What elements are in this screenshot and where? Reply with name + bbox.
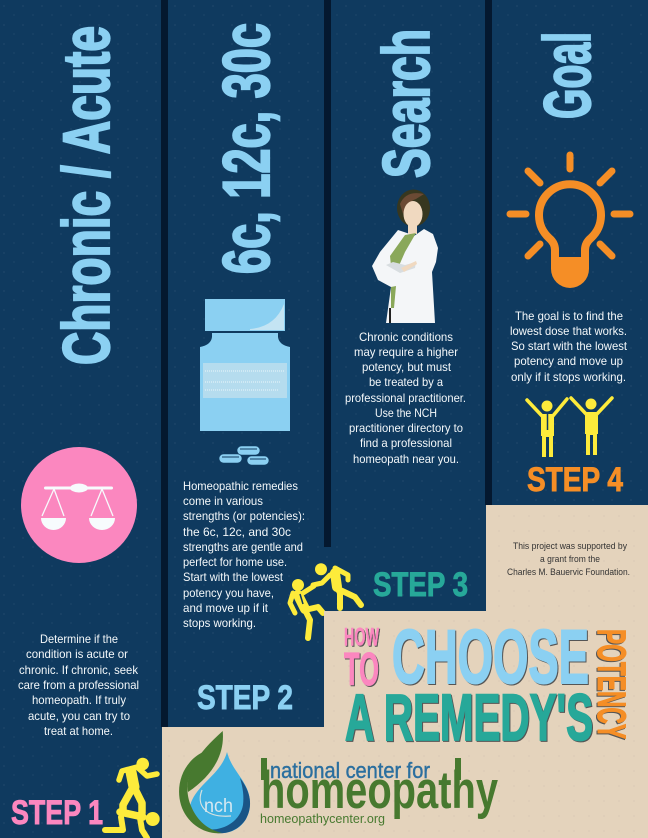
text: step 1 description: Determine if the bbox=[40, 632, 118, 646]
text: step 1 description: care from a professional bbox=[18, 678, 139, 692]
step 2 label: STEP 2 bbox=[197, 679, 293, 717]
step 4 label: STEP 4 bbox=[527, 461, 623, 499]
title: how to choose a remedy's potency bbox=[344, 615, 633, 754]
text: step 2 description: Homeopathic remedies bbox=[183, 479, 298, 493]
panel: step 1 chronic or acute bbox=[11, 26, 160, 838]
icon: two cheering people bbox=[527, 398, 612, 457]
text: step 4 description: So start with the lowest bbox=[511, 339, 628, 353]
text: grant acknowledgement bbox=[507, 541, 630, 578]
text: step 3 description: potency, but must bbox=[362, 360, 452, 374]
text: step 3 description: homeopath near you. bbox=[353, 452, 459, 466]
text: step 3 description: Use the NCH bbox=[375, 406, 437, 420]
step 3 label: STEP 3 bbox=[373, 566, 468, 604]
panel: beige title and logo area bbox=[162, 505, 648, 838]
text: step 3 description: practitioner directory to bbox=[349, 421, 463, 435]
title: how to choose a remedy's potency: HOW bbox=[344, 624, 379, 652]
text: step 3 description: find a professional bbox=[360, 436, 452, 450]
text: grant acknowledgement: Charles M. Bauervic Foundation. bbox=[507, 567, 630, 578]
text: step 1 description: treat at home. bbox=[44, 724, 113, 738]
text: step 1 description: homeopath. If truly bbox=[32, 693, 126, 707]
logo text: website: homeopathycenter.org bbox=[260, 811, 385, 826]
logo text: homeopathy: homeopathy bbox=[261, 761, 498, 820]
text: step 4 description: potency and move up bbox=[514, 354, 623, 368]
icon: doctor in white coat bbox=[372, 190, 438, 323]
panel: step 2 potencies bbox=[183, 23, 305, 717]
text: grant acknowledgement: a grant from the bbox=[540, 554, 600, 565]
step 1 label: STEP 1 bbox=[11, 794, 103, 832]
icon: leaf and water drop: nch bbox=[204, 796, 233, 817]
logo: national center for homeopathy bbox=[179, 731, 498, 833]
text: step 2 description: come in various bbox=[183, 494, 263, 508]
title: how to choose a remedy's potency: POTENCY bbox=[589, 629, 633, 739]
icon: soccer players bbox=[105, 758, 160, 838]
text: step 2 description: strengths (or potencies): bbox=[183, 509, 305, 523]
text: step 4 description: lowest dose that works. bbox=[510, 324, 627, 338]
text: grant acknowledgement: This project was supported by bbox=[513, 541, 627, 552]
text: step 4 description bbox=[510, 309, 628, 384]
text: step 1 description bbox=[18, 632, 139, 738]
text: step 1 description: chronic. If chronic, seek bbox=[19, 663, 139, 677]
icon: pills bbox=[219, 446, 269, 465]
text: step 2 description: and move up if it bbox=[183, 601, 269, 615]
icon: light bulb bbox=[510, 155, 630, 288]
logo text: national center for: national center for bbox=[270, 758, 430, 783]
panel: step 4 goal bbox=[510, 32, 630, 499]
icon: scales in pink circle bbox=[21, 447, 137, 563]
panel: step 3 search bbox=[290, 29, 468, 638]
text: step 2 description: strengths are gentle and bbox=[183, 540, 303, 554]
text: step 2 description: stops working. bbox=[183, 616, 256, 630]
text: step 3 description: Chronic conditions bbox=[359, 330, 453, 344]
text: step 2 description: the 6c, 12c, and 30c bbox=[183, 525, 291, 539]
icon: leaf and water drop bbox=[179, 731, 250, 833]
icon: remedy jar bbox=[200, 299, 290, 431]
text: step 4 description: The goal is to find the bbox=[515, 309, 623, 323]
text: step 1 description: acute, you can try to bbox=[28, 709, 130, 723]
text: step 3 description bbox=[345, 330, 466, 466]
text: step 4 description: only if it stops working. bbox=[511, 370, 626, 384]
text: step 3 description: be treated by a bbox=[369, 375, 443, 389]
text: step 2 description: potency you have, bbox=[183, 586, 274, 600]
text: step 2 description: Start with the lowest bbox=[183, 570, 284, 584]
text: step 3 description: professional practitioner. bbox=[345, 391, 466, 405]
title: how to choose a remedy's potency: TO bbox=[344, 643, 379, 695]
icon: climbers helping bbox=[290, 563, 361, 638]
text: step 2 description: perfect for home use. bbox=[183, 555, 287, 569]
text: step 1 description: condition is acute or bbox=[26, 647, 128, 661]
text: step 3 description: may require a higher bbox=[354, 345, 458, 359]
text: step 2 description bbox=[183, 479, 305, 630]
